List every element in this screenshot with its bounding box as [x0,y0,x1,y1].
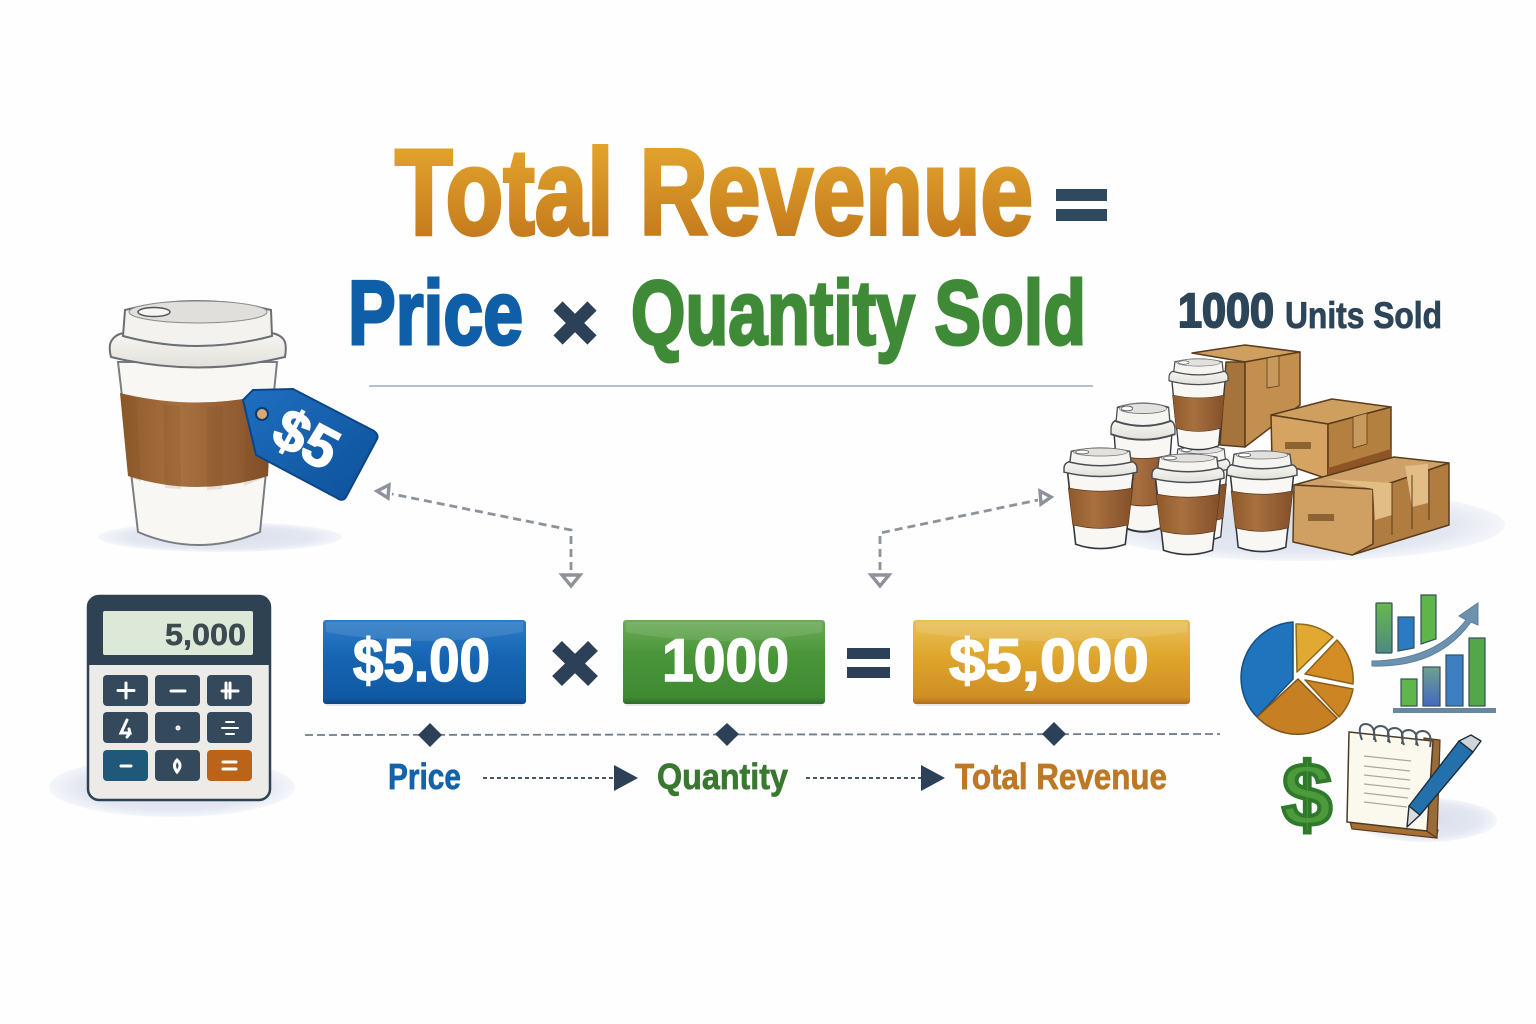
text: 1000 Units Sold: 1000 [1178,285,1274,338]
formula box: $5.00: $5.00 [353,627,490,694]
arrow: price connector [377,485,580,586]
coffee cup: front middle [1152,454,1224,555]
calculator keys [103,675,252,781]
notepad lines [1364,756,1411,807]
heading: Price x Quantity Sold: Quantity Sold [631,263,1086,364]
formula box: $5.00 [323,620,526,706]
cardboard box: top [1192,345,1300,447]
price tag: $5 [263,395,350,483]
icon: calculator: 5,000 [165,617,246,652]
text: 1000 Units Sold [1178,285,1442,338]
formula box: $5,000 [913,620,1190,706]
label: Quantity: Quantity [657,756,788,797]
formula box: $5,000: $5,000 [949,627,1149,694]
heading: Price x Quantity Sold: Price [348,263,523,364]
icon: calculator [49,596,295,817]
price tag [243,389,378,500]
coffee cup: front right [1227,451,1297,552]
calculator key symbols [118,683,238,772]
arrow: quantity to total revenue [806,765,945,791]
coffee cup: back left [1111,403,1175,532]
icon: green dollar sign: $ [1282,746,1332,846]
icon: bar charts with growth arrow [1372,595,1496,713]
divider rule [369,385,1093,387]
text: 1000 Units Sold: Units Sold [1285,295,1442,336]
formula box: 1000: 1000 [662,627,789,694]
icon: pie chart [1241,622,1353,734]
coffee cup: top [1169,359,1228,450]
label: Total Revenue: Total Revenue [955,756,1167,797]
coffee cup: behind middle [1172,446,1230,541]
cardboard box: bottom [1293,457,1449,555]
pen [1407,735,1481,827]
formula box: 1000 [623,620,825,706]
coffee cup: front left [1064,448,1137,549]
icon: stacked coffee cups and cardboard boxes [1064,345,1505,561]
icon: coffee cup with $5 price tag [98,301,378,552]
operator: multiply [557,646,593,681]
heading: Price x Quantity Sold [348,263,1086,364]
heading: Total Revenue =: Total Revenue [395,124,1033,260]
arrow: quantity connector [871,491,1051,586]
icon: notepad and pen [1347,724,1497,842]
dashed timeline with diamonds [305,722,1220,747]
arrow: price to quantity [483,765,638,791]
notepad spiral rings [1360,724,1431,747]
operator: equals [847,648,890,678]
cardboard box: middle [1271,399,1391,479]
label: Price: Price [388,756,461,797]
